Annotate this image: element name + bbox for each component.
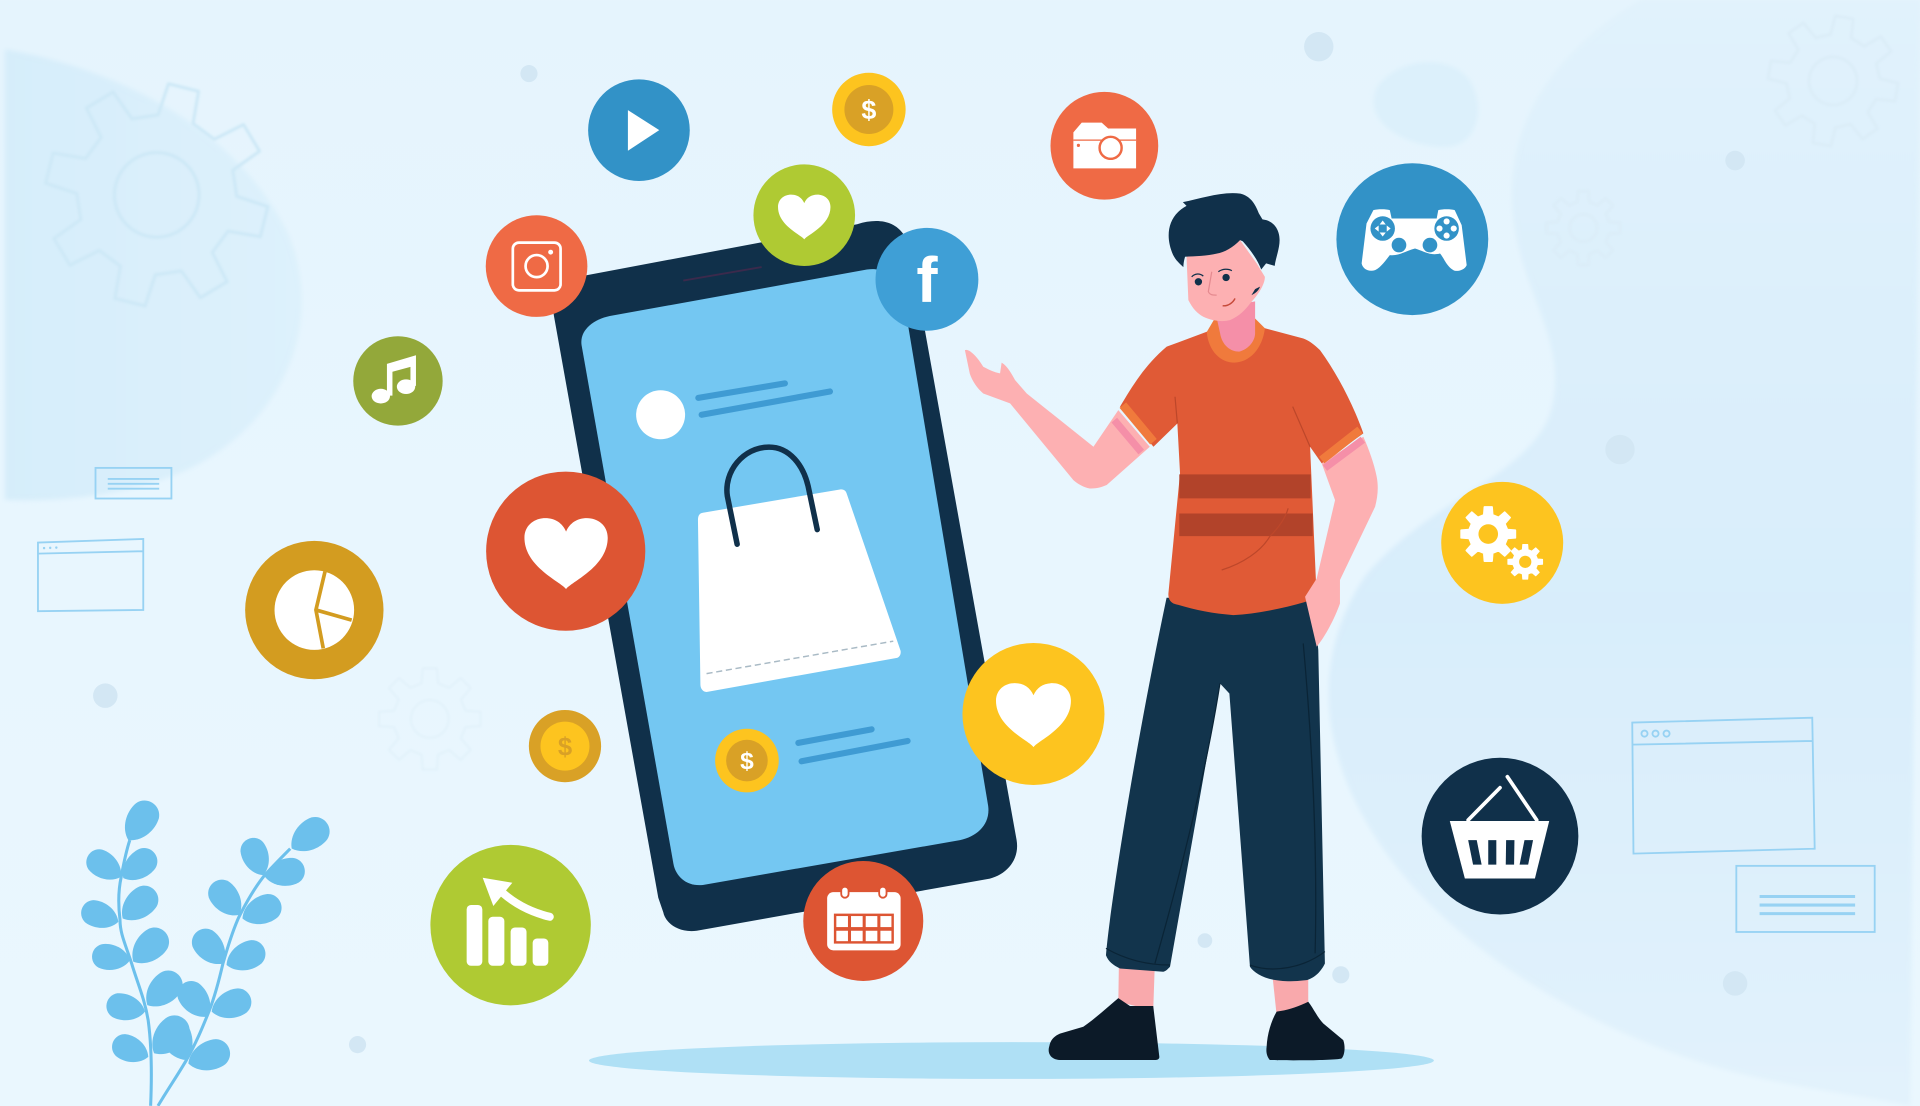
icon: yellow heart: [962, 643, 1104, 785]
icon: music: [353, 336, 443, 426]
coin on screen: [715, 729, 779, 792]
person: [965, 193, 1378, 1060]
icon: red heart: [486, 472, 645, 631]
left arm: [965, 350, 1150, 489]
icon: growth chart: [430, 845, 591, 1005]
icon: facebook: [876, 228, 978, 331]
shopping bag: [698, 447, 901, 692]
background blob left: [5, 49, 302, 500]
ground shadow: [589, 1042, 1434, 1079]
icon: coin top: $: [861, 95, 876, 125]
phone speaker: [683, 267, 762, 281]
icon: gears: [1441, 482, 1563, 604]
icon: facebook: f: [916, 245, 938, 316]
collar: [1207, 319, 1265, 363]
hair: [1169, 193, 1280, 295]
icon: coin lower: $: [558, 734, 572, 762]
background dots: [93, 32, 1747, 1053]
icon: play: [588, 79, 690, 181]
right arm: [1305, 437, 1378, 647]
t-shirt stripes: [1179, 474, 1313, 536]
phone body: [553, 221, 1017, 931]
icon: basket: [1422, 758, 1578, 914]
t-shirt folds: [1175, 397, 1310, 570]
background blob right: [1329, 0, 1920, 1106]
shoes: [1049, 998, 1345, 1060]
icon: coin lower: [529, 710, 601, 782]
background gears: [23, 6, 1908, 770]
icon: game controller: [1336, 163, 1488, 315]
trousers: [1106, 598, 1325, 981]
face details: [1192, 269, 1235, 306]
trouser seams: [1106, 643, 1325, 969]
coin on screen: $: [740, 748, 754, 775]
sleeve cuffs and shadows: [1114, 405, 1363, 468]
background blob top right: [1374, 62, 1478, 147]
plant: [77, 795, 335, 1106]
window wireframes: [38, 468, 1875, 932]
icon: green heart: [753, 164, 855, 266]
phone: [553, 221, 1017, 931]
neck: [1215, 301, 1255, 352]
t-shirt: [1120, 328, 1363, 615]
icon: pie chart: [245, 541, 384, 679]
icon: coin top: [832, 73, 906, 146]
icon: calendar: [803, 861, 923, 981]
head: [1187, 240, 1265, 321]
icon: instagram: [486, 215, 587, 317]
icon: camera: [1050, 92, 1158, 200]
profile dot and text lines: [636, 383, 830, 439]
lower text lines: [798, 729, 908, 761]
ankles: [1118, 961, 1308, 1015]
phone screen: [581, 269, 988, 885]
